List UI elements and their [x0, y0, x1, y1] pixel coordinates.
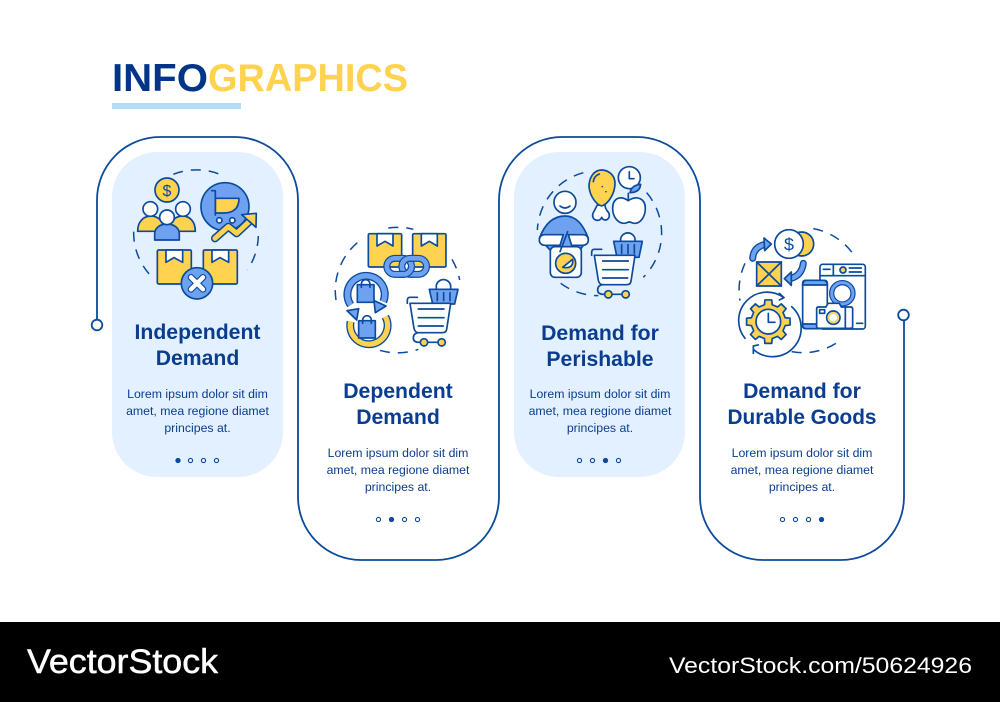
text block: demand for perishable: Perishable [546, 348, 654, 371]
text block: dependent demand: Demand [356, 406, 440, 429]
icon: demand for durable goods [739, 229, 865, 357]
text block: demand for durable goods: Durable Goods [728, 406, 876, 429]
text block: independent demand: Demand [156, 347, 239, 370]
text block: independent demand: Lorem ipsum dolor sit dim [127, 387, 268, 401]
text block: demand for perishable: principes at. [567, 421, 633, 435]
text block: dependent demand: Dependent [343, 380, 453, 403]
text block: independent demand: Independent [135, 321, 260, 344]
icon: demand for perishable [537, 167, 662, 298]
icon: independent demand: $ [163, 183, 172, 200]
pagination dots: card 1 [176, 458, 219, 463]
text block: independent demand: amet, mea regione diamet [126, 404, 270, 418]
title: INFO [112, 57, 208, 100]
right connector dot [898, 310, 909, 320]
text block: dependent demand [327, 380, 470, 494]
footer bar [0, 622, 1000, 702]
footer bar: VectorStock [27, 643, 219, 681]
text block: dependent demand: principes at. [365, 480, 431, 494]
left connector dot [92, 320, 102, 330]
text block: demand for durable goods [728, 380, 876, 494]
text block: dependent demand: amet, mea regione diamet [327, 463, 470, 477]
text block: demand for durable goods: Lorem ipsum dolor sit dim [732, 446, 872, 460]
icon: demand for durable goods: $ [784, 234, 794, 254]
text block: dependent demand: Lorem ipsum dolor sit dim [328, 446, 468, 460]
title underline [112, 103, 241, 109]
text block: independent demand: principes at. [164, 421, 231, 435]
icon: dependent demand [335, 227, 460, 353]
pagination dots: card 2 [376, 517, 420, 522]
text block: independent demand [126, 321, 270, 435]
footer bar: VectorStock.com/50624926 [669, 653, 972, 678]
icon: independent demand [134, 170, 258, 299]
pagination dots: card 4 [780, 517, 824, 522]
text block: demand for perishable [529, 322, 672, 435]
text block: demand for durable goods: amet, mea regione diamet [731, 463, 874, 477]
connecting outline [97, 137, 904, 560]
text block: demand for perishable: Lorem ipsum dolor sit dim [530, 387, 670, 401]
text block: demand for durable goods: Demand for [743, 380, 861, 403]
title [112, 57, 408, 100]
text block: demand for durable goods: principes at. [769, 480, 835, 494]
panel: perishable background [514, 152, 685, 477]
panel: independent demand background [112, 152, 283, 477]
text block: demand for perishable: amet, mea regione diamet [529, 404, 672, 418]
text block: demand for perishable: Demand for [541, 322, 659, 345]
pagination dots: card 3 [577, 458, 621, 463]
title: GRAPHICS [208, 57, 408, 100]
